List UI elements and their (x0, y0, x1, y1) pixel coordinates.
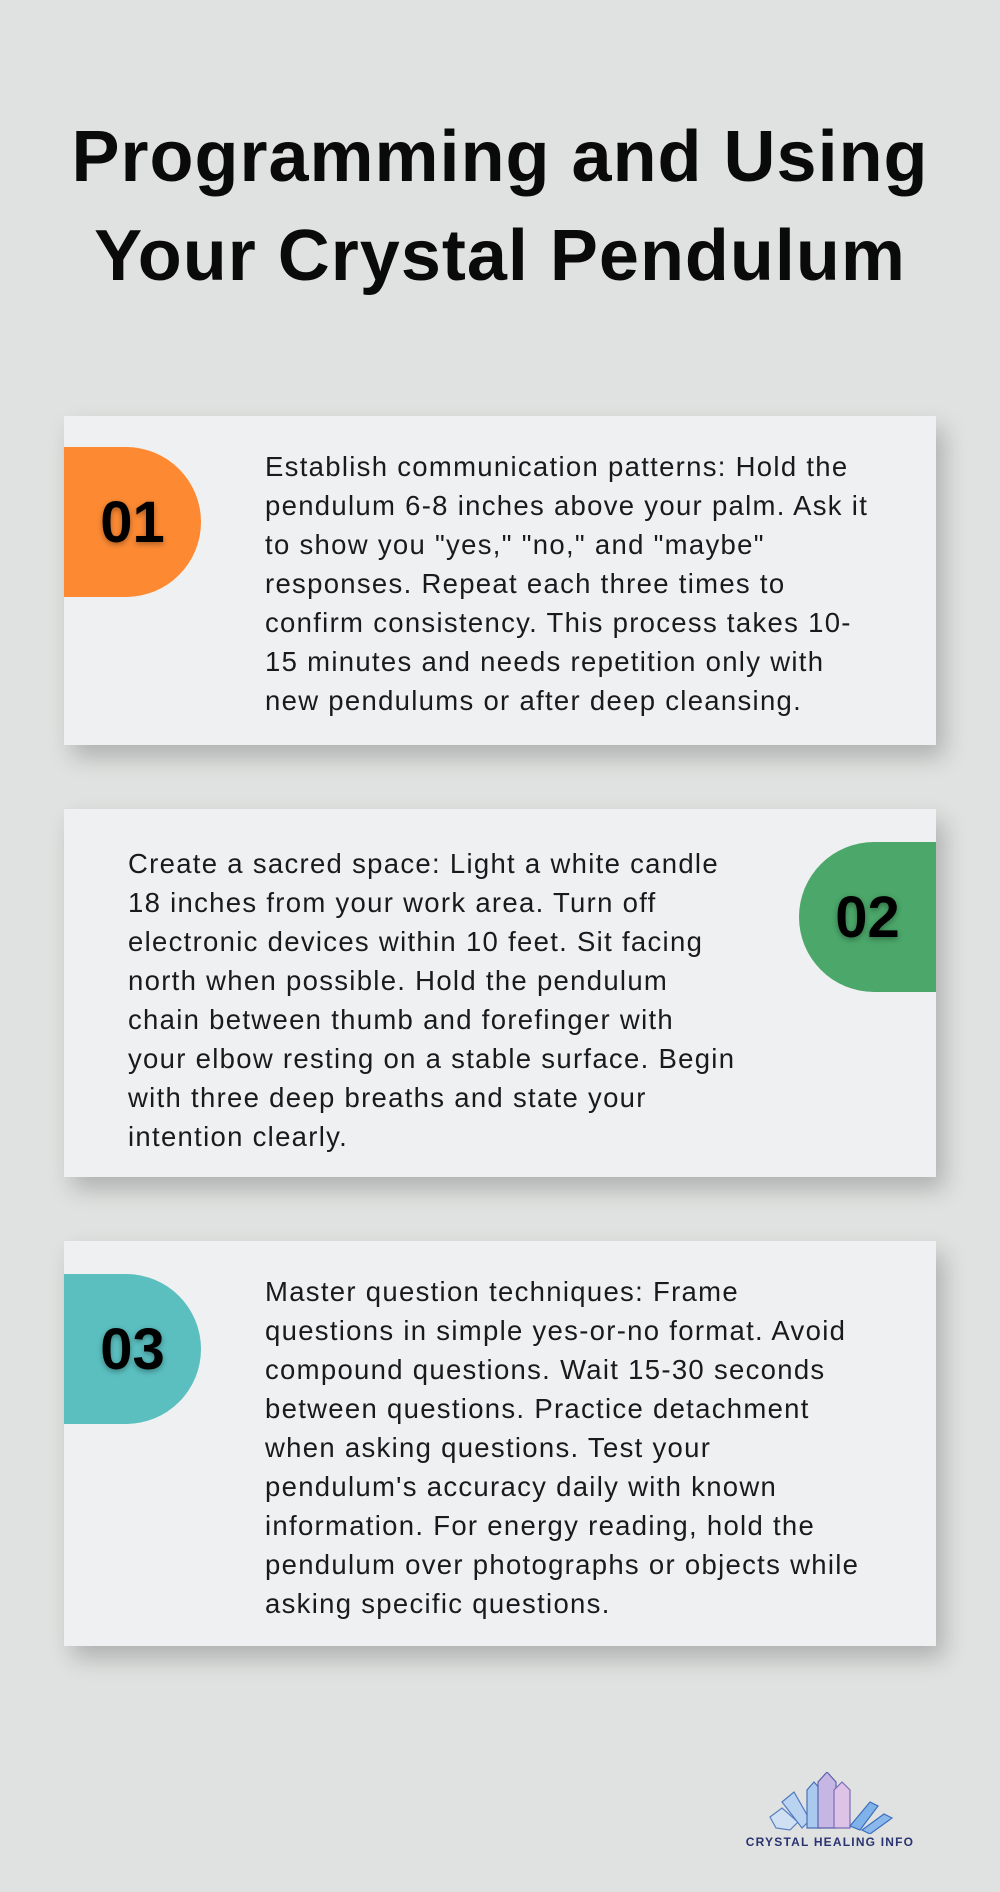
text 03: information. For energy reading, hold the (265, 1510, 815, 1541)
text 02: Create a sacred space: Light a white candle (128, 848, 719, 879)
text 02: north when possible. Hold the pendulum (128, 965, 668, 996)
text 03: compound questions. Wait 15-30 seconds (265, 1354, 826, 1385)
badge 03 (64, 1274, 201, 1424)
text 01 (265, 451, 868, 716)
text 03: Master question techniques: Frame (265, 1276, 739, 1307)
badge 02 (799, 842, 936, 992)
logo (746, 1772, 914, 1849)
text 02 (128, 848, 735, 1152)
text 02: 18 inches from your work area. Turn off (128, 887, 657, 918)
panel: step 02 (64, 809, 936, 1177)
badge 01: 01 (100, 490, 165, 554)
badge 02: 02 (835, 884, 900, 950)
title: Programming and Using (71, 117, 929, 197)
text 03: asking specific questions. (265, 1588, 611, 1619)
text 01: pendulum 6-8 inches above your palm. Ask it (265, 490, 868, 521)
text 01: 15 minutes and needs repetition only with (265, 646, 824, 677)
logo text: CRYSTAL HEALING INFO (746, 1835, 914, 1849)
text 02: your elbow resting on a stable surface. Begin (128, 1043, 735, 1074)
text 02: with three deep breaths and state your (128, 1082, 647, 1113)
text 03 (265, 1276, 859, 1619)
panel: step 03 (64, 1241, 936, 1646)
badge 03: 03 (100, 1316, 165, 1382)
text 02: intention clearly. (128, 1121, 348, 1152)
icon: crystals (769, 1772, 893, 1834)
text 01: responses. Repeat each three times to (265, 568, 785, 599)
text 01: confirm consistency. This process takes 10- (265, 607, 852, 638)
text 03: between questions. Practice detachment (265, 1393, 810, 1424)
text 03: questions in simple yes-or-no format. Avoid (265, 1315, 846, 1346)
panel: step 01 (64, 416, 936, 745)
text 02: electronic devices within 10 feet. Sit facing (128, 926, 703, 957)
text 01: new pendulums or after deep cleansing. (265, 685, 802, 716)
text 01: Establish communication patterns: Hold the (265, 451, 848, 482)
text 01: to show you "yes," "no," and "maybe" (265, 529, 765, 560)
text 03: pendulum's accuracy daily with known (265, 1471, 777, 1502)
title (71, 117, 929, 296)
badge 01 (64, 447, 201, 597)
text 03: pendulum over photographs or objects while (265, 1549, 859, 1580)
title: Your Crystal Pendulum (94, 216, 906, 296)
text 02: chain between thumb and forefinger with (128, 1004, 674, 1035)
text 03: when asking questions. Test your (265, 1432, 711, 1463)
